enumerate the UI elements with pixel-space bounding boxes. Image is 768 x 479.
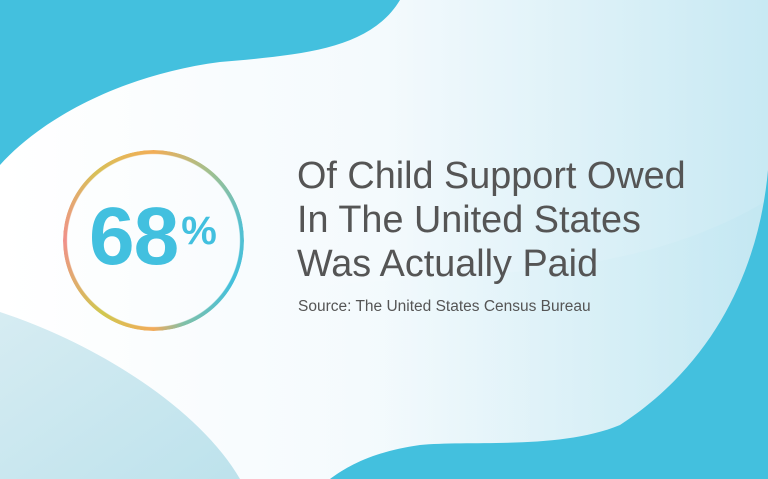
gradient ring	[63, 150, 244, 331]
source: Source: The United States Census Bureau	[298, 298, 591, 315]
headline: Of Child Support Owed	[297, 155, 686, 197]
headline: In The United States	[297, 199, 641, 241]
headline: Was Actually Paid	[297, 243, 598, 285]
headline	[297, 155, 686, 285]
stat number: 68%	[89, 191, 217, 282]
stat circle	[63, 150, 244, 331]
